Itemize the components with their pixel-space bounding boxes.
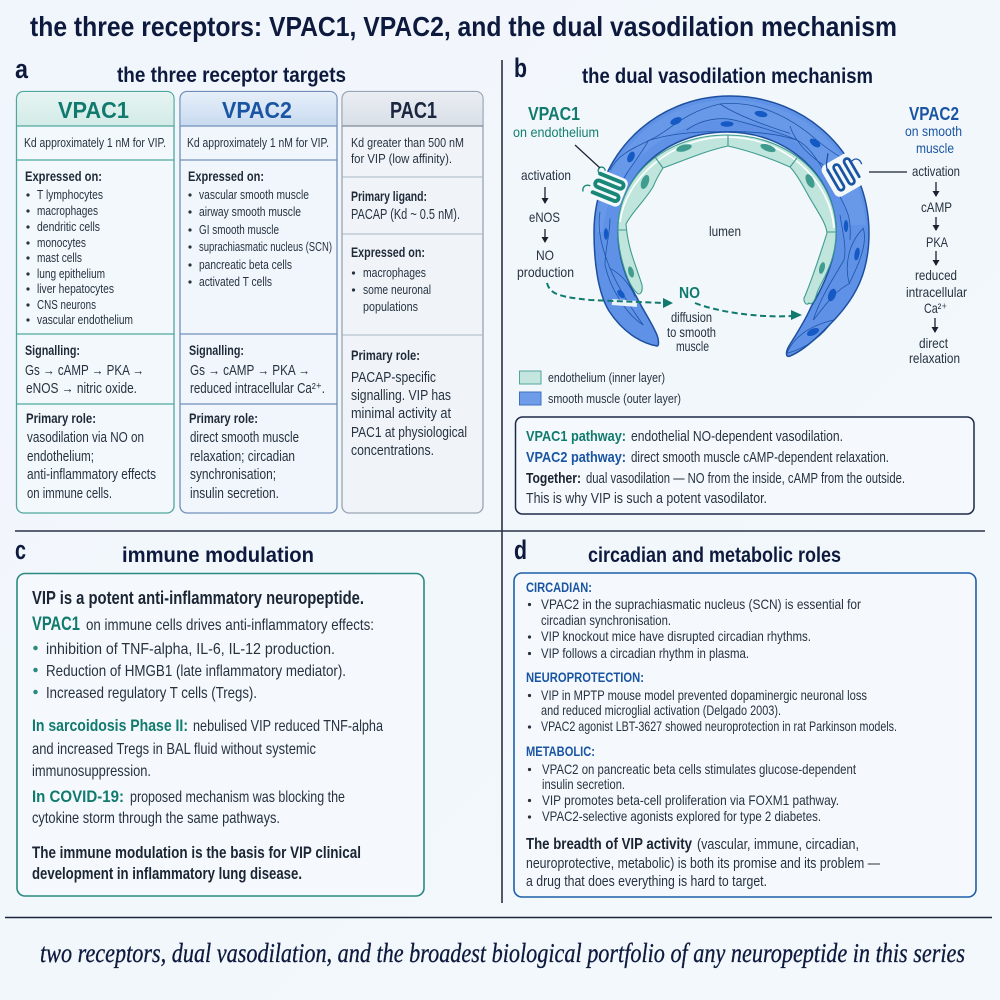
VPAC2 signalling: Gs → cAMP → PKA → xyxy=(190,363,310,379)
endothelial cell junctions xyxy=(618,135,836,232)
endothelium layer xyxy=(618,135,836,304)
sarcoidosis: immunosuppression. xyxy=(32,763,151,780)
VPAC1 cascade xyxy=(517,167,574,280)
VPAC2 signalling xyxy=(189,342,325,397)
smooth muscle nuclei xyxy=(604,110,861,338)
heading a: the three receptor targets xyxy=(117,63,346,87)
label: lumen: lumen xyxy=(709,224,741,239)
VPAC2 cascade: intracellular xyxy=(906,284,967,300)
neuroprotection section: VIP in MPTP mouse model prevented dopaminergic neuronal loss xyxy=(541,687,867,703)
panel letter b: b xyxy=(514,53,527,83)
VPAC1 primary role: vasodilation via NO on xyxy=(27,430,144,446)
VPAC1 primary role xyxy=(26,410,156,502)
VPAC1 effects: VPAC1 xyxy=(32,614,80,635)
metabolic section: VIP promotes beta-cell proliferation via FOXM1 pathway. xyxy=(542,792,839,808)
leader: VPAC2 xyxy=(869,171,907,173)
conclusion c: The immune modulation is the basis for VIP clinical xyxy=(32,844,361,862)
COVID-19: proposed mechanism was blocking the xyxy=(130,789,345,806)
neuroprotection section: and reduced microglial activation (Delgado 2003). xyxy=(541,702,781,718)
panel d: circadian and metabolic roles xyxy=(514,535,976,897)
smooth muscle cell outlines xyxy=(610,103,850,240)
VPAC1 expressed on: T lymphocytes xyxy=(37,187,103,202)
VPAC2 cascade xyxy=(906,163,967,366)
callout: pathway summary: Together: xyxy=(526,470,581,487)
PAC1 affinity: Kd greater than 500 nM xyxy=(351,135,464,150)
metabolic section: VPAC2 on pancreatic beta cells stimulates glucose-dependent xyxy=(542,761,856,777)
sarcoidosis: In sarcoidosis Phase II: xyxy=(32,716,188,735)
smooth muscle layer xyxy=(594,96,869,356)
callout: pathway summary: This is why VIP is such a potent vasodilator. xyxy=(526,491,767,507)
VPAC1 expressed on: vascular endothelium xyxy=(37,312,133,327)
COVID-19: In COVID-19: xyxy=(32,787,124,806)
VPAC2 primary role xyxy=(189,410,299,502)
metabolic section: insulin secretion. xyxy=(542,776,625,792)
metabolic section: METABOLIC: xyxy=(526,744,595,759)
PAC1 primary role: PACAP-specific xyxy=(351,370,436,386)
label: VPAC2 on smooth muscle: muscle xyxy=(916,140,954,156)
VPAC2 cascade: relaxation xyxy=(909,350,960,366)
conclusion c xyxy=(32,844,361,883)
neuroprotection section: VPAC2 agonist LBT-3627 showed neuroprotection in rat Parkinson models. xyxy=(541,718,897,734)
circadian section: CIRCADIAN: xyxy=(526,580,592,595)
label: VPAC2 on smooth muscle: on smooth xyxy=(905,123,962,139)
lead sentence: VIP is a potent anti-inflammatory neuropeptide. xyxy=(32,588,364,608)
label: VPAC1 on endothelium: VPAC1 xyxy=(528,104,580,124)
VPAC1 header: VPAC1 xyxy=(58,97,129,123)
conclusion d: (vascular, immune, circadian, xyxy=(697,836,859,853)
VPAC2 cascade: Ca²⁺ xyxy=(924,300,947,316)
conclusion d xyxy=(526,836,880,890)
card: VPAC2 xyxy=(180,92,337,513)
sarcoidosis xyxy=(32,716,383,780)
VPAC1 expressed on: mast cells xyxy=(37,250,82,265)
label: diffusion to smooth muscle: to smooth xyxy=(667,325,716,340)
PAC1 primary role: PAC1 at physiological xyxy=(351,425,467,441)
VPAC1 cascade: production xyxy=(517,264,574,280)
diagram: blood vessel cross-section xyxy=(547,96,871,356)
VPAC2 cascade: PKA xyxy=(926,234,949,250)
heading c: immune modulation xyxy=(122,543,314,567)
conclusion c: development in inflammatory lung disease. xyxy=(32,865,302,883)
PAC1 primary role: Primary role: xyxy=(351,347,420,363)
panel letter d: d xyxy=(514,535,527,565)
VPAC2 expressed on: GI smooth muscle xyxy=(199,222,279,237)
title: the three receptors: VPAC1, VPAC2, and the dual vasodilation mechanism xyxy=(30,11,897,42)
circadian section: VIP knockout mice have disrupted circadian rhythms. xyxy=(541,628,811,644)
VPAC2 primary role: synchronisation; xyxy=(190,467,276,483)
VPAC2 header: VPAC2 xyxy=(222,97,292,123)
label: NO: NO xyxy=(679,285,700,302)
panel letter c: c xyxy=(15,535,26,565)
legend: endothelium (inner layer) xyxy=(548,370,665,385)
VPAC1 primary role: anti-inflammatory effects xyxy=(27,467,156,483)
VPAC1 signalling: eNOS → nitric oxide. xyxy=(26,381,137,397)
arrow: NO production to NO xyxy=(547,283,673,308)
PAC1 affinity: for VIP (low affinity). xyxy=(351,151,452,166)
VPAC2 signalling: reduced intracellular Ca²⁺. xyxy=(190,381,325,397)
card: VPAC1 xyxy=(16,92,174,513)
VPAC1 expressed on: CNS neurons xyxy=(37,297,96,312)
VPAC1 expressed on: lung epithelium xyxy=(37,266,105,281)
COVID-19: cytokine storm through the same pathways. xyxy=(32,810,280,827)
legend: smooth muscle (outer layer) xyxy=(548,391,681,406)
PAC1 primary ligand: PACAP (Kd ~ 0.5 nM). xyxy=(351,207,460,223)
circadian section: VPAC2 in the suprachiasmatic nucleus (SCN) is essential for xyxy=(541,596,861,612)
PAC1 primary role: minimal activity at xyxy=(351,406,451,422)
callout: pathway summary: VPAC1 pathway: xyxy=(526,428,626,445)
VPAC1 signalling: Gs → cAMP → PKA → xyxy=(25,363,144,379)
VPAC2 expressed on: Expressed on: xyxy=(188,168,264,184)
PAC1 primary role xyxy=(351,347,467,459)
VPAC2 primary role: relaxation; circadian xyxy=(190,449,295,465)
circadian section xyxy=(526,580,861,661)
VPAC1 effects: Increased regulatory T cells (Tregs). xyxy=(46,685,257,702)
VPAC1 expressed on: Expressed on: xyxy=(25,168,102,184)
arrow: NO to smooth muscle xyxy=(695,303,802,320)
PAC1 header: PAC1 xyxy=(390,97,437,123)
VPAC1 primary role: endothelium; xyxy=(27,449,94,465)
label: VPAC2 on smooth muscle: VPAC2 xyxy=(909,104,959,124)
sarcoidosis: and increased Tregs in BAL fluid without systemic xyxy=(32,741,316,758)
PAC1 primary role: concentrations. xyxy=(351,443,434,459)
VPAC2 expressed on: suprachiasmatic nucleus (SCN) xyxy=(199,239,332,254)
VPAC2 affinity: Kd approximately 1 nM for VIP. xyxy=(187,135,329,150)
icon: VPAC1 receptor xyxy=(581,163,630,208)
VPAC1 effects: inhibition of TNF-alpha, IL-6, IL-12 production. xyxy=(46,641,335,658)
VPAC2 cascade: direct xyxy=(919,335,948,351)
heading d: circadian and metabolic roles xyxy=(588,543,841,567)
label: VPAC1 on endothelium: on endothelium xyxy=(513,124,599,140)
callout: pathway summary: direct smooth muscle cAMP-dependent relaxation. xyxy=(631,450,889,466)
PAC1 expressed on: some neuronal xyxy=(363,282,431,297)
VPAC1 expressed on: liver hepatocytes xyxy=(37,281,114,296)
VPAC2 expressed on: pancreatic beta cells xyxy=(199,257,292,272)
VPAC1 cascade: activation xyxy=(521,167,571,183)
VPAC1 expressed on: monocytes xyxy=(37,235,86,250)
label: VPAC1 on endothelium xyxy=(513,104,599,140)
label: diffusion to smooth muscle xyxy=(667,310,716,354)
neuroprotection section xyxy=(526,670,897,734)
VPAC2 primary role: insulin secretion. xyxy=(190,486,279,502)
PAC1 expressed on xyxy=(351,244,431,314)
PAC1 primary ligand: Primary ligand: xyxy=(351,188,427,204)
callout: pathway summary: endothelial NO-dependent vasodilation. xyxy=(631,429,843,445)
VPAC2 expressed on xyxy=(188,168,332,289)
VPAC2 cascade: reduced xyxy=(915,267,957,283)
leader: VPAC1 xyxy=(575,145,600,168)
VPAC1 expressed on: dendritic cells xyxy=(37,219,100,234)
VPAC1 expressed on: macrophages xyxy=(37,203,98,218)
VPAC2 cascade: cAMP xyxy=(921,199,952,215)
PAC1 expressed on: Expressed on: xyxy=(351,244,425,260)
icon: VPAC2 receptor xyxy=(815,141,871,199)
VPAC1 affinity: Kd approximately 1 nM for VIP. xyxy=(24,135,166,150)
VPAC1 expressed on xyxy=(25,168,133,327)
metabolic section xyxy=(526,744,856,824)
PAC1 affinity xyxy=(351,135,464,166)
VPAC1 effects: on immune cells drives anti-inflammatory effects: xyxy=(86,617,374,634)
callout: pathway summary: dual vasodilation — NO from the inside, cAMP from the outside. xyxy=(586,471,905,487)
VPAC2 expressed on: activated T cells xyxy=(199,274,272,289)
VPAC2 expressed on: vascular smooth muscle xyxy=(199,187,309,202)
VPAC1 cascade: eNOS xyxy=(529,209,560,225)
callout: pathway summary: VPAC2 pathway: xyxy=(526,449,626,466)
conclusion d: The breadth of VIP activity xyxy=(526,836,692,853)
VPAC2 primary role: direct smooth muscle xyxy=(190,430,299,446)
label: VPAC2 on smooth muscle xyxy=(905,104,962,156)
panel c: immune modulation xyxy=(15,535,424,896)
VPAC1 signalling xyxy=(25,342,144,397)
label: diffusion to smooth muscle: diffusion xyxy=(671,310,712,325)
VPAC1 cascade: NO xyxy=(536,247,554,263)
conclusion d: neuroprotective, metabolic) is both its promise and its problem — xyxy=(526,855,880,872)
callout: pathway summary xyxy=(516,417,974,514)
panel letter a: a xyxy=(15,54,29,84)
panel b: the dual vasodilation mechanism xyxy=(513,53,974,514)
endothelial nuclei xyxy=(627,142,826,278)
VPAC2 primary role: Primary role: xyxy=(189,410,258,426)
VPAC1 primary role: on immune cells. xyxy=(27,486,112,502)
white halo behind NO path xyxy=(612,302,637,304)
circadian section: VIP follows a circadian rhythm in plasma. xyxy=(541,645,749,661)
card: PAC1 xyxy=(342,92,483,513)
heading b: the dual vasodilation mechanism xyxy=(582,64,873,88)
sarcoidosis: nebulised VIP reduced TNF-alpha xyxy=(193,718,383,735)
VPAC2 cascade: activation xyxy=(912,163,960,179)
PAC1 expressed on: macrophages xyxy=(363,265,426,280)
circadian section: circadian synchronisation. xyxy=(541,612,671,628)
VPAC1 effects: Reduction of HMGB1 (late inflammatory mediator). xyxy=(46,663,346,680)
VPAC1 signalling: Signalling: xyxy=(25,342,80,358)
VPAC2 expressed on: airway smooth muscle xyxy=(199,204,301,219)
PAC1 expressed on: populations xyxy=(363,299,418,314)
panel a: the three receptor targets xyxy=(15,54,483,513)
legend xyxy=(520,370,681,406)
PAC1 primary role: signalling. VIP has xyxy=(351,388,451,404)
text box c xyxy=(17,574,424,896)
neuroprotection section: NEUROPROTECTION: xyxy=(526,670,644,685)
metabolic section: VPAC2-selective agonists explored for type 2 diabetes. xyxy=(542,808,821,824)
VPAC2 signalling: Signalling: xyxy=(189,342,244,358)
VPAC1 primary role: Primary role: xyxy=(26,410,96,426)
VPAC1 effects xyxy=(32,614,374,702)
text box d xyxy=(514,573,976,897)
label: diffusion to smooth muscle: muscle xyxy=(676,339,709,354)
COVID-19 xyxy=(32,787,345,827)
conclusion d: a drug that does everything is hard to target. xyxy=(526,873,767,890)
PAC1 primary ligand xyxy=(351,188,460,223)
